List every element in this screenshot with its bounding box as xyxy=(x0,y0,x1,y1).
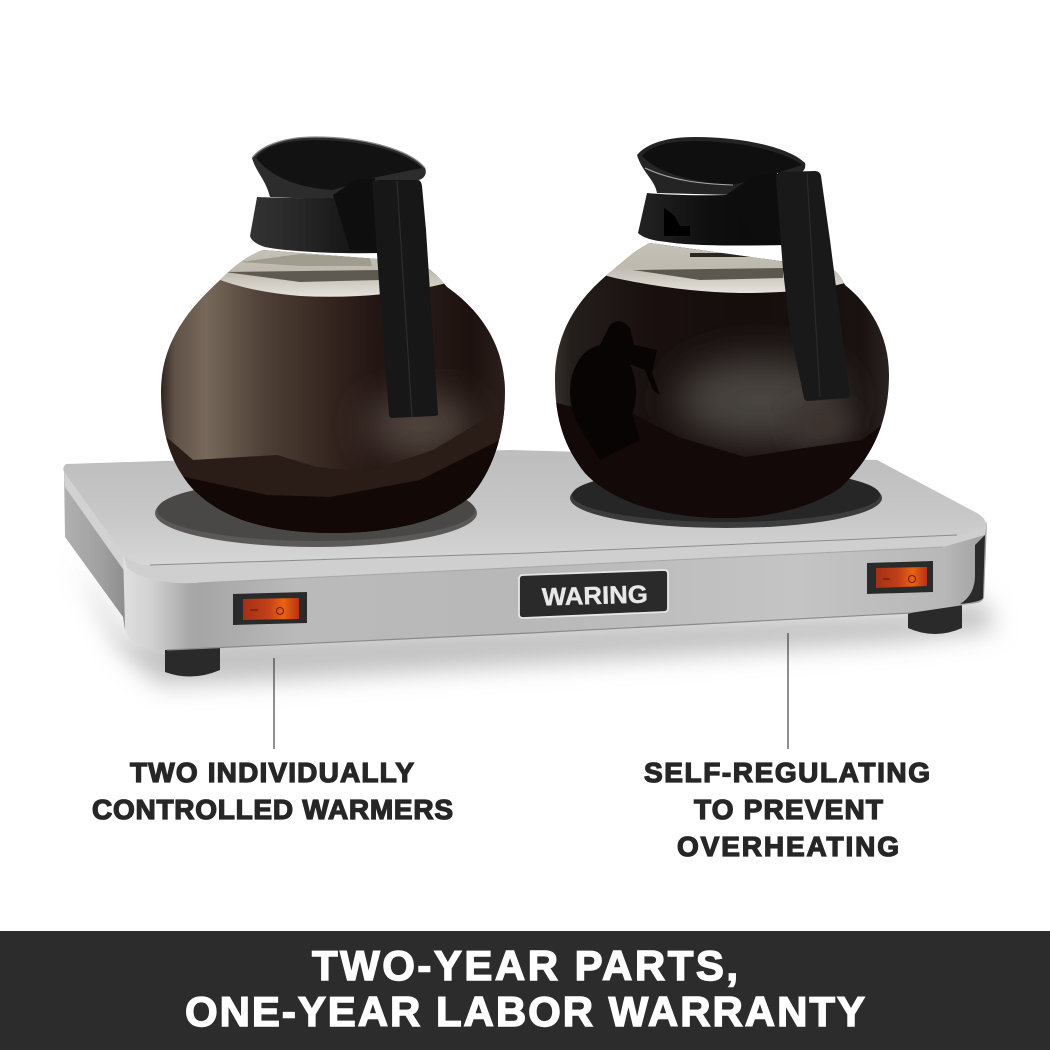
callout: self-regulating xyxy=(644,757,930,862)
reflection of decanter xyxy=(570,321,660,460)
warmer feet xyxy=(165,605,962,677)
right decanter handle xyxy=(776,171,850,401)
right heating plate xyxy=(570,468,882,528)
warmer base xyxy=(63,450,987,650)
Waring logo badge: WARING xyxy=(542,581,648,611)
leader line left xyxy=(273,658,275,749)
right decanter xyxy=(545,137,895,525)
left decanter xyxy=(150,137,520,540)
callout: self-regulating: SELF-REGULATING xyxy=(644,757,930,788)
callout: self-regulating: TO PREVENT xyxy=(694,794,883,825)
warranty banner xyxy=(0,931,1050,1050)
right decanter funnel xyxy=(637,137,805,195)
callout: two warmers: TWO INDIVIDUALLY xyxy=(130,757,414,788)
left decanter handle xyxy=(372,180,438,418)
callout: two warmers xyxy=(92,757,453,825)
left decanter body with coffee xyxy=(161,250,505,533)
right spout bridge xyxy=(725,173,785,240)
left decanter collar xyxy=(250,195,382,253)
left heating plate xyxy=(155,479,477,547)
left switch xyxy=(233,592,307,625)
leader line right xyxy=(787,633,789,749)
right decanter collar xyxy=(638,190,786,246)
warranty text: TWO-YEAR PARTS, xyxy=(312,942,738,989)
left decanter funnel xyxy=(252,137,426,200)
warranty text: ONE-YEAR LABOR WARRANTY xyxy=(185,988,865,1035)
right switch xyxy=(867,561,933,594)
left spout bridge xyxy=(333,178,380,250)
right decanter body with coffee xyxy=(545,235,895,525)
warmer shadow xyxy=(75,560,995,685)
Waring logo badge xyxy=(519,570,668,618)
callout: self-regulating: OVERHEATING xyxy=(677,831,899,862)
right collar reflection xyxy=(664,208,690,236)
warranty text xyxy=(185,942,865,1035)
callout: two warmers: CONTROLLED WARMERS xyxy=(92,794,453,825)
